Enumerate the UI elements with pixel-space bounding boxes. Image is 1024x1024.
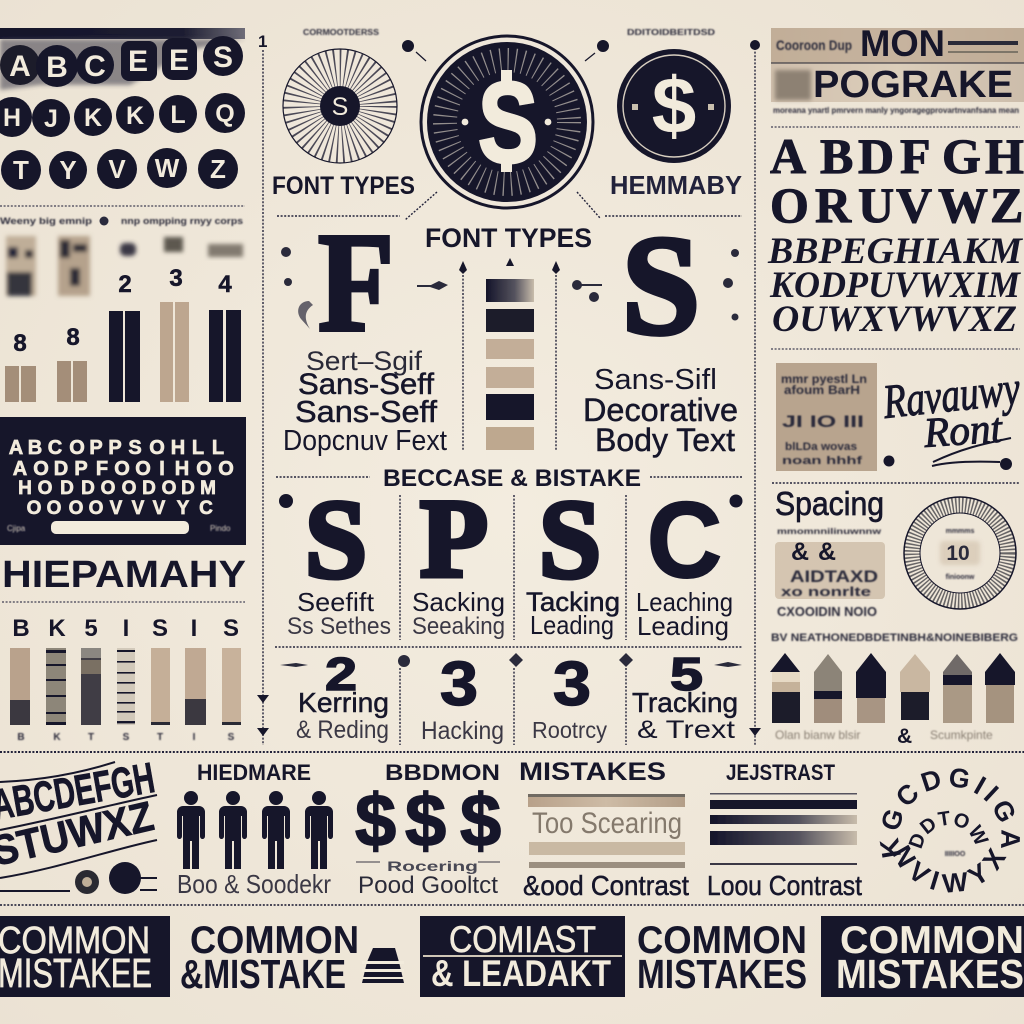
- text block 4: COMMON: [637, 919, 807, 962]
- text block 2: [180, 919, 359, 997]
- tan collage card: JI IO III: [782, 412, 864, 431]
- black box 3: & LEADAKT: [431, 953, 611, 994]
- house 1: [770, 653, 800, 723]
- black box 1: [0, 916, 170, 997]
- panel: common mistakes strip: [0, 916, 1024, 997]
- title MISTAKES: MISTAKES: [519, 758, 666, 786]
- black box 3: [420, 916, 625, 997]
- row 3 letter buttons: TYVWZ: [13, 153, 226, 185]
- S decorations: [572, 249, 739, 320]
- title BBDMON: BBDMON: [385, 760, 500, 785]
- house 6: [985, 653, 1015, 723]
- panel: right type samples: [767, 23, 1024, 349]
- italic alphabet row 2: KODPUVWXIM: [769, 265, 1021, 306]
- specimen captions column 4: Leaching: [636, 587, 733, 617]
- Kerring caption: & Reding: [296, 716, 389, 744]
- ring dial: [904, 497, 1016, 609]
- specimen captions column 1: [287, 587, 391, 640]
- Hacking caption: Hacking: [421, 717, 504, 745]
- panel: people: [177, 760, 333, 899]
- tan collage card: mmr pyestl Ln: [781, 372, 867, 386]
- house 3: [856, 653, 886, 723]
- tiny keyboard captions: [7, 524, 231, 533]
- numeral 3: 3: [440, 650, 478, 719]
- panel: low contrast: [707, 760, 862, 901]
- badge: radial S: [283, 49, 397, 163]
- text block 2: COMMON: [190, 919, 359, 962]
- caption: small text left: CORMOOTDERSS: [303, 28, 380, 37]
- header block: Cooroon Dup: [776, 37, 852, 53]
- frame: center vertical rules: [257, 32, 761, 745]
- row 3 letter buttons: [1, 148, 238, 190]
- text block 2: &MISTAKE: [180, 951, 346, 997]
- black box 5: [821, 916, 1024, 997]
- tan collage card: noan hhhf: [782, 455, 863, 467]
- panel: wave alphabet: [0, 754, 158, 894]
- panel: dollars: [355, 760, 501, 899]
- smudged Rocering caption: Rocering: [387, 858, 478, 874]
- specimen captions column 2: Sacking: [412, 587, 505, 617]
- icon: stacked lines: [362, 948, 404, 983]
- big P: P: [420, 477, 488, 601]
- dark header band: [0, 28, 245, 90]
- house captions: Olan bianw blsir: [775, 728, 860, 742]
- pin right: [585, 40, 608, 61]
- ring dial: finioonw: [946, 574, 975, 581]
- center swatch stack: [486, 279, 534, 450]
- Kerring caption: [296, 687, 389, 744]
- panel: spacing: [771, 485, 1018, 644]
- junction dots: [280, 653, 742, 667]
- key letters: OOOOVVVYC: [27, 498, 213, 519]
- person icons: [177, 791, 333, 869]
- smudged caption row: nnp ompping rnyy corps: [121, 216, 243, 226]
- caption &ood Contrast: &ood Contrast: [523, 870, 689, 901]
- panel: numbered tips: [280, 648, 742, 745]
- black box 1: COMMON: [0, 920, 150, 962]
- Tracking caption: [632, 687, 738, 744]
- Kerring caption: Kerring: [298, 687, 389, 718]
- smudged caption: mmomnnilinuwnnw: [777, 527, 882, 536]
- house 5: [943, 654, 972, 723]
- caption Loou Contrast: Loou Contrast: [707, 870, 862, 901]
- Tracking caption: Tracking: [632, 687, 738, 718]
- specimen captions column 1: Ss Sethes: [287, 613, 391, 640]
- tan bars 6: [5, 366, 36, 402]
- spacing sample block: [775, 538, 885, 619]
- circular alphabet: KGCDGIIGA: [880, 768, 1020, 858]
- spacing sample block: xo nonrlte: [781, 584, 871, 599]
- smudged divider text: BV NEATHONEDBDETINBH&NOINEBIBERG: [771, 632, 1018, 644]
- numeral 2: 2: [325, 648, 357, 700]
- spacing sample block: CXOOIDIN NOIO: [777, 604, 877, 619]
- label: HEMMABY: HEMMABY: [610, 170, 742, 200]
- heading: HIEPAMAHY: HIEPAMAHY: [2, 554, 246, 596]
- circular alphabet: [880, 768, 1020, 892]
- space bar: [51, 521, 189, 534]
- wave strokes: [0, 762, 157, 891]
- key letters: [9, 437, 234, 519]
- panel: font types: [276, 203, 742, 492]
- Rootrcy caption: Rootrcy: [532, 717, 607, 743]
- big S: S: [305, 478, 367, 602]
- spacing sample block: AIDTAXD: [790, 567, 878, 586]
- right type list: Body Text: [595, 422, 735, 458]
- text block 4: [637, 919, 807, 997]
- heading: Spacing: Spacing: [775, 485, 884, 522]
- key letters: HODDOODODM: [18, 478, 216, 499]
- circular alphabet: IIIIIOO: [945, 851, 966, 858]
- tan bars 8: [57, 361, 87, 402]
- swatch captions: BKTSTIS: [17, 732, 235, 743]
- house captions: Scumkpinte: [930, 728, 993, 742]
- faded sample card: [528, 794, 685, 868]
- house captions: [775, 725, 993, 748]
- row 2 letter buttons: HJKKLQ: [3, 100, 235, 133]
- specimen captions column 4: Leading: [637, 611, 729, 641]
- text block 4: MISTAKES: [637, 951, 807, 997]
- bullets: [884, 456, 1012, 470]
- title JEJSTRAST: JEJSTRAST: [726, 760, 835, 785]
- tan bars 3: [160, 302, 189, 402]
- pin left: [402, 40, 426, 61]
- panel: too leading: [519, 758, 689, 901]
- panel: house swatches: [770, 653, 1015, 748]
- big serif S: S: [622, 206, 700, 364]
- left type list: Dopcnuv Fext: [283, 425, 447, 457]
- serif alphabet row 1: ABDFGH: [770, 128, 1024, 184]
- big S 2: S: [539, 478, 601, 602]
- frame: center vertical rules: 1: [258, 32, 267, 51]
- left type list: Sans-Seff: [295, 394, 437, 429]
- smudged caption row: [0, 216, 243, 226]
- title HIEDMARE: HIEDMARE: [197, 760, 311, 785]
- badge: large dollar: [421, 36, 593, 208]
- heading: FONT TYPES: FONT TYPES: [425, 223, 592, 253]
- corner dots: [279, 494, 742, 508]
- ring dial: 10: [946, 542, 970, 565]
- house 4: [900, 654, 930, 720]
- badge: small dollar: $: [652, 61, 696, 150]
- small blobs: [120, 237, 243, 257]
- panel: keyboard: [0, 417, 246, 545]
- Tracking caption: & Trext: [637, 716, 735, 744]
- caption Boo & Soodekr: Boo & Soodekr: [177, 869, 331, 899]
- dark bars 4: [209, 310, 241, 402]
- swatch letters: BK5ISIS: [12, 615, 239, 642]
- panel: alphabet buttons: [0, 28, 245, 190]
- serif alphabet row 2: ORUVWZ: [770, 177, 1023, 233]
- house captions: &: [897, 725, 912, 748]
- F decorations: [281, 247, 448, 329]
- black box 3: COMIAST: [449, 919, 596, 960]
- tiny keyboard captions: Cjipa: [7, 524, 26, 533]
- smudged caption row: Weeny big emnip: [0, 216, 93, 226]
- panel: numbered bars: [0, 216, 243, 402]
- row 1 letter buttons: ABCEES: [9, 41, 233, 84]
- caption: small text right: DDITOIDBEITDSD: [627, 28, 715, 37]
- right type list: Sans-Sifl: [594, 364, 717, 396]
- header block: MON: [860, 23, 945, 64]
- panel: top badges: [272, 28, 742, 220]
- italic alphabet row 3: OUWXVWVXZ: [772, 299, 1017, 340]
- swatch columns: [10, 648, 241, 725]
- dots: [75, 862, 141, 894]
- smudged subtitle: moreana ynartl pmrvern manly yngoragegprovartnvanfsana mean: [773, 106, 1019, 115]
- dark bars 2: [109, 311, 140, 402]
- specimen captions column 3: Tacking: [526, 587, 620, 617]
- specimen captions column 4: [636, 587, 733, 641]
- faded sample card: Too Scearing: [532, 807, 682, 840]
- tan collage card: blLDa wovas: [785, 441, 857, 453]
- house 2: [814, 654, 842, 723]
- specimen captions column 1: Seefift: [297, 587, 375, 617]
- panel: striped swatches: [10, 615, 241, 743]
- right type list: [583, 364, 738, 458]
- specimen captions column 2: Seeaking: [412, 613, 505, 640]
- numeral 3 second: 3: [553, 650, 591, 719]
- label: FONT TYPES left: FONT TYPES: [272, 172, 415, 200]
- numeral 5: 5: [670, 648, 703, 700]
- swatch side rules: [459, 258, 560, 450]
- contrast stripes: [710, 793, 857, 865]
- left type list: Sans-Seff: [298, 368, 435, 401]
- left type list: [283, 346, 447, 457]
- right type list: Decorative: [583, 392, 738, 428]
- black box 1: MISTAKEE: [0, 950, 152, 996]
- key letters: ABCOPPSOHLL: [9, 437, 224, 459]
- circular alphabet: NVIWYX: [893, 844, 1006, 892]
- badge: small dollar: [617, 49, 731, 163]
- header block: POGRAKE: [813, 64, 1013, 106]
- badge: radial S: S: [332, 93, 348, 121]
- caption Pood Gooltct: Pood Gooltct: [358, 872, 498, 899]
- specimen captions column 2: [412, 587, 505, 640]
- key letters: AODPFOOIHOO: [13, 458, 234, 480]
- small photo tiles: [6, 236, 90, 296]
- dollar signs: $$$: [355, 779, 501, 862]
- tiny keyboard captions: Pindo: [210, 524, 231, 533]
- italic alphabet row 1: BBPEGHIAKM: [767, 231, 1023, 272]
- specimen captions column 3: [526, 587, 620, 640]
- tan collage card: afoum BarH: [784, 383, 860, 397]
- circular alphabet: DDTOW: [908, 810, 990, 848]
- script lettering: [880, 362, 1023, 466]
- heading: BECCASE & BISTAKE: BECCASE & BISTAKE: [383, 465, 641, 492]
- numerals: 23488: [13, 265, 232, 357]
- header block: [771, 23, 1024, 106]
- badge: large dollar: S: [478, 60, 538, 187]
- specimen captions column 3: Leading: [530, 610, 614, 640]
- left type list: Sert–Sgif: [306, 346, 423, 376]
- panel: letter specimens: [275, 477, 742, 647]
- ring dial: mmmms: [946, 528, 974, 535]
- panel: decorative font: [772, 362, 1023, 483]
- big C: C: [647, 479, 722, 600]
- black box 5: COMMON: [840, 919, 1024, 962]
- script lettering: Ront: [922, 406, 1005, 457]
- tan collage card: [776, 363, 877, 471]
- spacing sample block: &&: [791, 538, 836, 566]
- big serif F: F: [318, 203, 394, 361]
